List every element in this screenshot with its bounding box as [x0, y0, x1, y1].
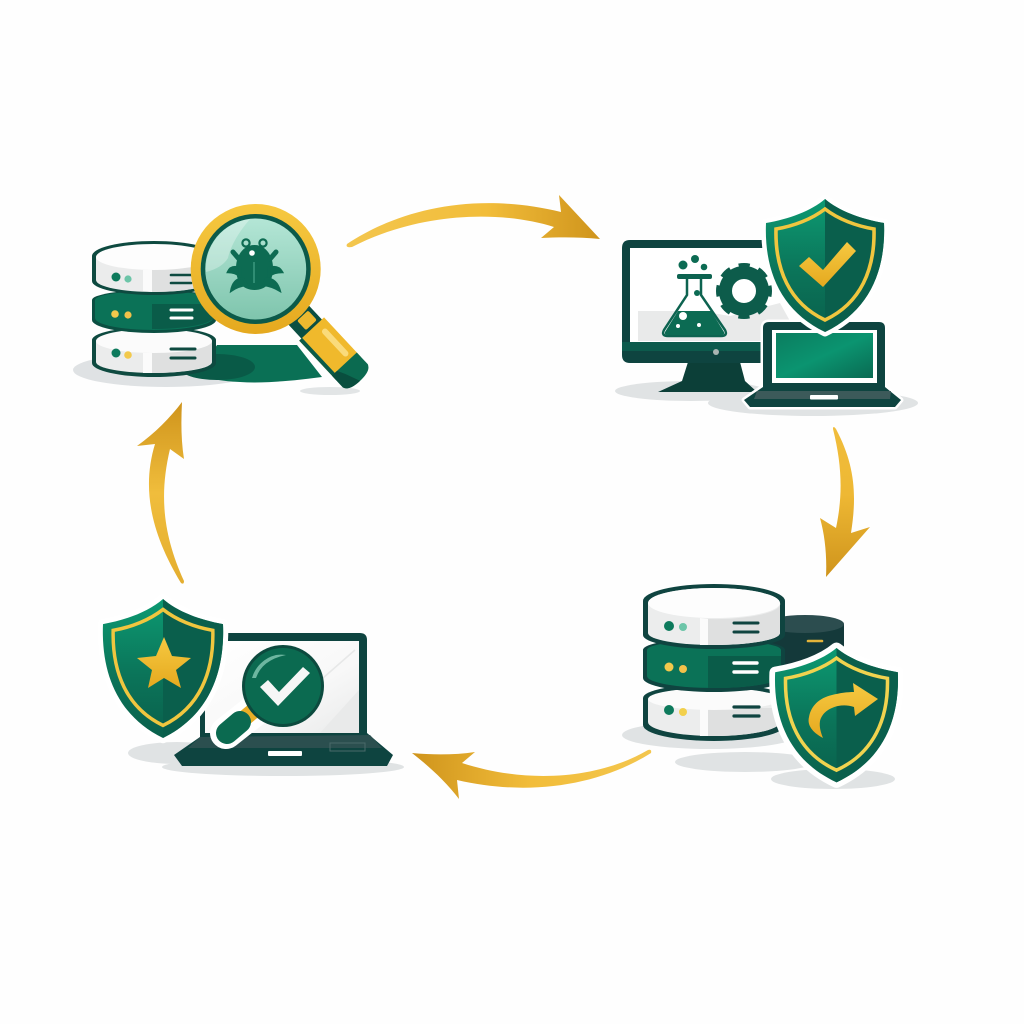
shield with forward arrow — [775, 648, 898, 782]
monitor stand — [658, 362, 757, 392]
green floor shape — [197, 345, 322, 382]
forward arrow glyph — [809, 683, 878, 738]
arrow: left, bottom to top — [137, 402, 184, 584]
arrow: right, top to bottom — [820, 427, 870, 577]
shield with star — [103, 599, 223, 738]
monitor — [622, 240, 795, 363]
laptop — [174, 633, 393, 766]
server tier 3 — [92, 327, 216, 377]
ground shadows — [622, 721, 798, 749]
server tier 2 — [643, 638, 785, 692]
icon: database with shield and forward arrow — [622, 584, 898, 789]
magnifier lens — [191, 204, 321, 334]
arrow: top, left to right — [347, 195, 600, 247]
icon: shield with star and laptop with magnifier check — [103, 599, 404, 776]
icon: flask — [663, 255, 726, 336]
back dark disk — [766, 615, 844, 670]
ground shadows — [128, 742, 226, 764]
server tier 2 — [92, 290, 216, 333]
ground shadow — [73, 353, 259, 387]
small handle shadow — [300, 387, 360, 395]
arrow: bottom, right to left — [412, 750, 651, 799]
icon: monitor with flask, gear, shield and laptop — [615, 199, 918, 416]
magnifier handle — [284, 301, 372, 392]
icon: gear — [718, 266, 770, 316]
icon: bug — [228, 239, 282, 291]
floor dark ellipse — [179, 354, 255, 380]
icon: database with magnifying glass and bug — [73, 204, 372, 395]
laptop — [744, 322, 901, 407]
server tier 1 — [92, 241, 216, 295]
magnifier handle — [226, 707, 258, 733]
shield with check — [766, 199, 884, 332]
server tier 3 — [643, 684, 785, 741]
icon: star — [137, 637, 191, 688]
magnifier with check — [242, 645, 324, 727]
ground shadows — [615, 381, 767, 401]
server tier 1 — [643, 584, 785, 649]
